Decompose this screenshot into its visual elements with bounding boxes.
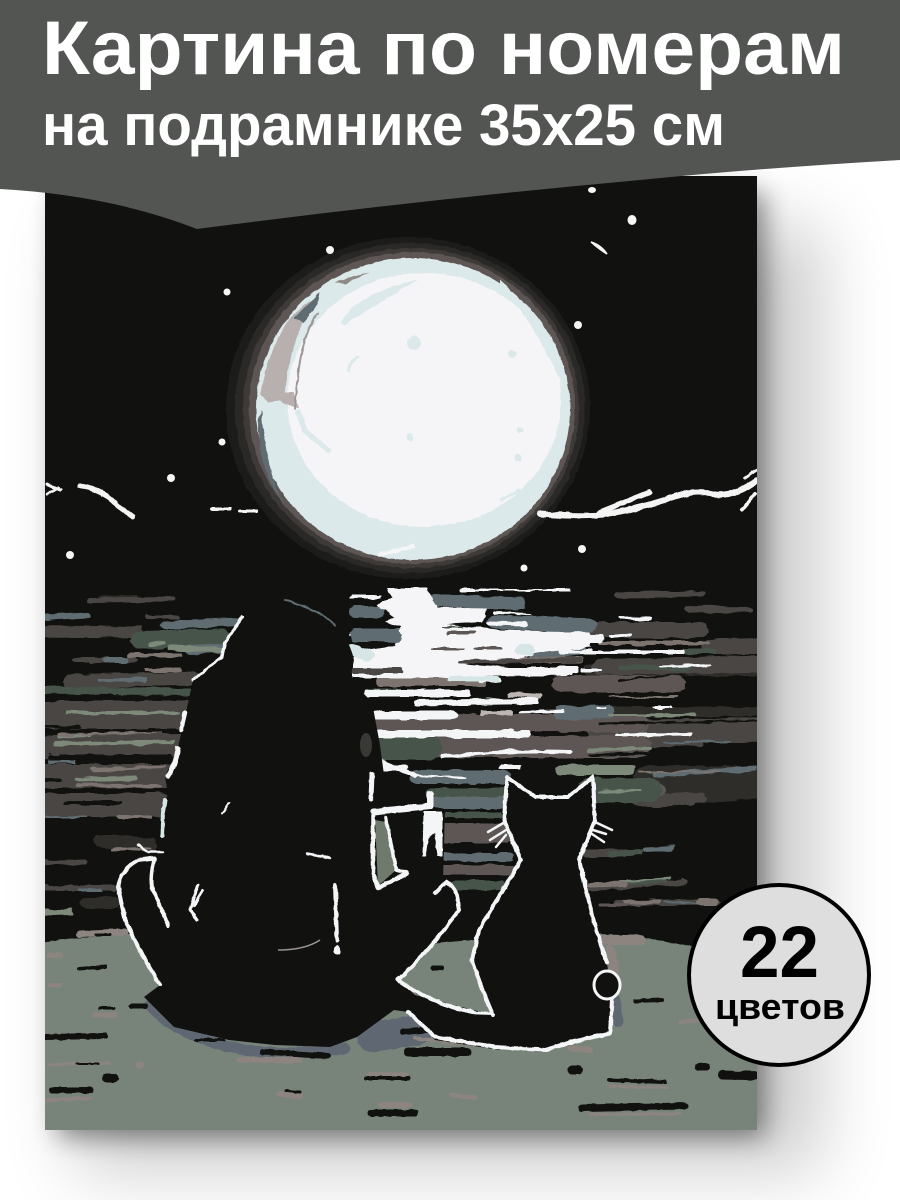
- sandy beach: [45, 934, 757, 1130]
- sea: dark olive base: [85, 597, 775, 903]
- girl silhouette from behind: [118, 600, 500, 1050]
- stars: [66, 187, 636, 572]
- painting: moon over the sea with girl and cat: [30, 176, 775, 1160]
- sea: brown-grey blocks: [30, 594, 775, 903]
- cat silhouette: [408, 777, 620, 1050]
- blue-grey shadow under the figures: [150, 1000, 618, 1053]
- brown fringes on sand: [47, 932, 700, 1114]
- title: Картина по номерам: [42, 6, 845, 91]
- night sky background: [45, 176, 757, 946]
- moon: [226, 237, 590, 579]
- sea: pale green stripes: [30, 642, 695, 913]
- sea: dark bands over water: [45, 653, 757, 852]
- sea: marks over the white patch: [352, 627, 580, 713]
- moon halo: [226, 237, 590, 579]
- black dashes on sand: [45, 935, 775, 1113]
- badge label: цветов: [715, 986, 845, 1027]
- canvas drop shadow: [58, 192, 820, 1170]
- cat tail tip: [594, 971, 620, 999]
- sea: warm brown bands: [372, 684, 677, 905]
- sea: green bands: [30, 620, 713, 885]
- sea: moon reflection: [350, 590, 710, 778]
- cat outline: [408, 777, 612, 1050]
- badge: 22 colours: [689, 885, 869, 1065]
- sea with moonlight streaks: [30, 588, 775, 920]
- hair fold shading: [360, 733, 372, 757]
- beach marks and shadow patches: [45, 932, 775, 1114]
- girl rim-light strokes: [118, 600, 493, 1015]
- sea: white moonlight patch: [352, 588, 590, 678]
- sea: light brown stripes: [58, 643, 720, 902]
- moon disc: [256, 258, 570, 560]
- subtitle: на подрамнике 35x25 см: [42, 93, 725, 158]
- badge number: 22: [740, 912, 819, 993]
- cup with water seen through arm: [375, 820, 396, 886]
- cat whiskers: [488, 822, 612, 847]
- back crease: [278, 940, 320, 950]
- cup drips: [423, 812, 442, 856]
- sea: blue-grey patches: [47, 600, 755, 903]
- banner: [0, 0, 900, 229]
- clouds on the horizon: [47, 470, 757, 517]
